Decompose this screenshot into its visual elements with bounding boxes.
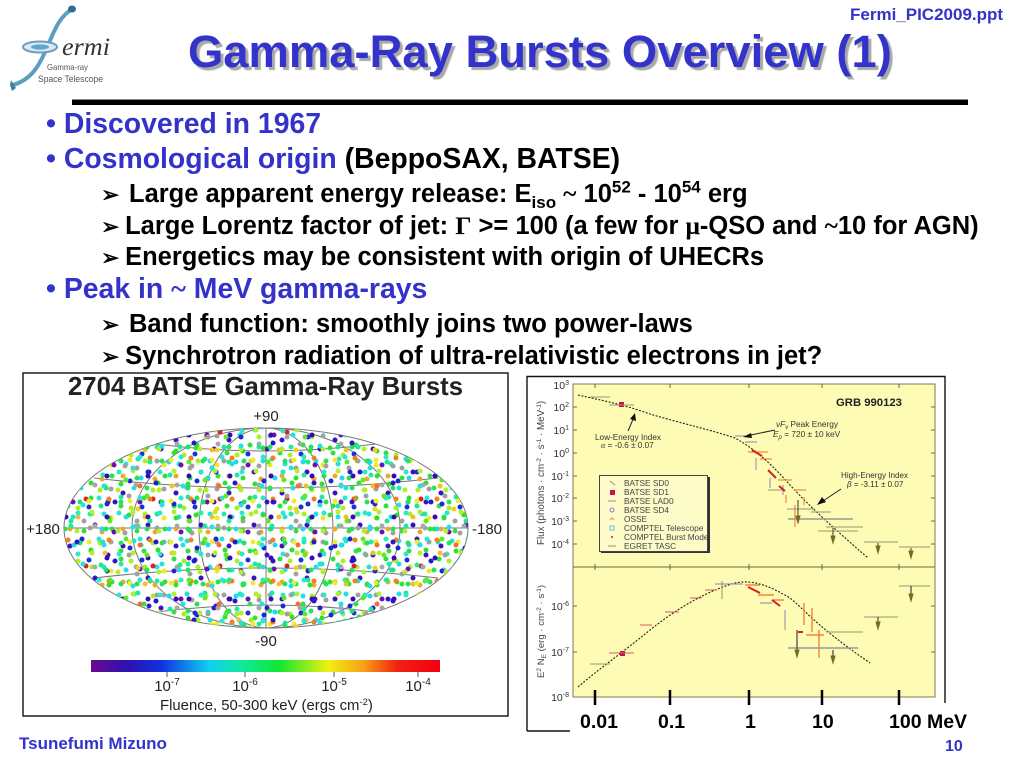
y axis labels: flux: 10 — [551, 493, 563, 505]
y axis labels: flux: 0 — [565, 448, 569, 455]
annotation: peak energy: E — [773, 429, 783, 441]
y axis labels: flux: -1 — [563, 471, 569, 478]
sub-bullet: synchrotron: ➢ — [101, 345, 119, 370]
logo: Fermi Gamma-ray Space Telescope — [10, 6, 110, 91]
axis labels — [26, 408, 502, 650]
energy axis labels: 0.1 — [658, 711, 685, 733]
legend: COMPTEL Burst Mode — [624, 532, 709, 542]
y axis title: energy flux: -2 — [536, 607, 543, 613]
sub-bullet: Lorentz factor: Large Lorentz factor of jet: Γ >= 100 (a few for μ-QSO and ~10 for AGN) — [125, 211, 979, 240]
annotation: high-energy index: High-Energy Index — [841, 471, 908, 480]
energy axis patch — [571, 703, 969, 733]
bottom spectrum curve — [578, 582, 870, 687]
y axis title: energy flux: · s — [536, 594, 547, 607]
y axis title: energy flux: ) — [536, 585, 547, 588]
legend: BATSE SD0 — [624, 478, 669, 488]
y axis labels: flux: 10 — [553, 448, 565, 460]
y axis labels: flux: 10 — [553, 402, 565, 414]
colour bar: -7 — [171, 677, 180, 688]
y axis title: flux: · MeV — [536, 409, 547, 439]
sub-bullet: energetics: Energetics may be consistent with origin of UHECRs — [125, 243, 764, 271]
annotation: low-energy index: α = -0.6 ± 0.07 — [601, 441, 654, 450]
map title: 2704 BATSE Gamma-Ray Bursts — [68, 373, 463, 401]
page number: 10 — [945, 738, 963, 755]
bullet: cosmological origin: • Cosmological origin (BeppoSAX, BATSE) — [46, 143, 620, 175]
y axis labels: flux: 10 — [553, 425, 565, 437]
logo: Fermi Gamma-ray Space Telescope: Gamma-ray — [47, 62, 89, 72]
y axis labels: flux: 10 — [551, 601, 563, 613]
y axis labels: flux: 10 — [551, 647, 563, 659]
annotation: high-energy index: β = -3.11 ± 0.07 — [846, 480, 904, 489]
sub-bullet: band function: ➢ — [101, 313, 119, 338]
sub-bullet: energy release: ➢ — [101, 183, 119, 208]
sub-bullet: Lorentz factor: ➢ — [101, 215, 119, 240]
energy axis labels — [580, 711, 967, 733]
legend: COMPTEL Telescope — [624, 523, 704, 533]
legend: BATSE LAD0 — [624, 496, 674, 506]
presenter name: Tsunefumi Mizuno — [19, 734, 167, 753]
bullet: peak: • Peak in ~ MeV gamma-rays — [46, 273, 427, 305]
axis labels: +180 — [26, 521, 60, 538]
annotation: peak energy: Peak Energy — [788, 419, 839, 429]
y axis labels: flux: 10 — [551, 692, 563, 704]
axis labels: -90 — [255, 633, 277, 650]
panel: BATSE sky map — [22, 372, 509, 717]
y axis title: flux: Flux (photons · cm — [536, 464, 547, 545]
legend — [600, 476, 710, 553]
colour bar caption: ) — [368, 698, 373, 714]
energy axis labels: 100 MeV — [889, 711, 967, 733]
y axis labels: flux: 10 — [551, 471, 563, 483]
y axis title: flux: · s — [536, 444, 547, 458]
panel divider and minor ticks — [573, 384, 935, 652]
y axis title: energy flux: E — [536, 672, 547, 678]
top data points — [590, 397, 930, 558]
y axis labels: flux: 10 — [551, 516, 563, 528]
colour bar: -6 — [249, 677, 258, 688]
energy axis labels: 1 — [745, 711, 756, 733]
sky map: burst dots and graticule — [64, 428, 468, 628]
annotation: low-energy index — [595, 413, 661, 450]
frame base — [527, 730, 570, 732]
y axis title: energy flux: E — [541, 653, 548, 658]
annotation: high-energy index — [817, 471, 908, 505]
annotation: low-energy index: Low-Energy Index — [595, 433, 661, 442]
logo: Fermi Gamma-ray Space Telescope: Space Telescope — [38, 74, 103, 84]
y axis labels: flux — [551, 380, 569, 704]
legend: BATSE SD4 — [624, 505, 669, 515]
logo: Fermi Gamma-ray Space Telescope: ermi — [62, 34, 110, 61]
y axis labels: flux: -2 — [563, 493, 569, 500]
top spectrum curve — [578, 395, 868, 558]
title: Gamma-Ray Bursts Overview (1) — [188, 26, 892, 77]
energy axis labels: 0.01 — [580, 711, 618, 733]
y axis title: energy flux: 2 — [536, 668, 543, 672]
bullet: discovered: • Discovered in 1967 — [46, 108, 321, 140]
y axis title: flux: -1 — [536, 438, 543, 444]
annotation: peak energy: νF — [776, 419, 788, 431]
sub-bullet text: band function: Band function: smoothly joins two power-laws — [129, 310, 693, 338]
burst name: GRB 990123 — [836, 397, 902, 409]
y axis labels: flux: -4 — [563, 539, 569, 546]
sub-bullet: energetics: ➢ — [101, 246, 119, 271]
colour bar caption: -2 — [359, 697, 368, 708]
plot area — [573, 384, 935, 697]
y axis title: flux: -1 — [536, 404, 543, 410]
y axis labels: flux: -7 — [563, 647, 569, 654]
legend: EGRET TASC — [624, 541, 676, 551]
energy axis labels: 10 — [812, 711, 834, 733]
colour bar: 10 — [232, 678, 249, 695]
annotation: peak energy: ν — [785, 425, 788, 431]
y axis labels: flux: 10 — [551, 539, 563, 551]
frame — [527, 376, 945, 731]
title rule — [72, 99, 968, 105]
y axis title: energy flux: (erg · cm — [536, 613, 547, 654]
y axis title: flux: ) — [536, 401, 547, 404]
legend: BATSE SD1 — [624, 487, 669, 497]
y axis labels: flux: 3 — [565, 380, 569, 387]
panel: GRB 990123 spectrum — [526, 376, 946, 732]
y axis title: flux: -2 — [536, 458, 543, 464]
colour bar — [91, 660, 440, 695]
sub-bullet: synchrotron: Synchrotron radiation of ultra-relativistic electrons in jet? — [125, 342, 822, 370]
colour bar: 10 — [321, 678, 338, 695]
axis labels: +90 — [253, 408, 279, 425]
y axis labels: flux: 2 — [565, 402, 569, 409]
colour bar: 10 — [154, 678, 171, 695]
legend: OSSE — [624, 514, 648, 524]
colour bar caption: Fluence, 50-300 keV (ergs cm — [160, 698, 359, 714]
y axis labels: flux: 1 — [565, 425, 569, 432]
annotation: peak energy — [743, 419, 841, 441]
y axis labels: flux: -8 — [563, 692, 569, 699]
y axis labels: flux: -3 — [563, 516, 569, 523]
y axis labels: flux: 10 — [553, 380, 565, 392]
source file tag: Fermi_PIC2009.ppt — [850, 5, 1003, 24]
y axis labels: flux: -6 — [563, 601, 569, 608]
colour bar: -5 — [338, 677, 347, 688]
y axis title: energy flux: -1 — [536, 588, 543, 594]
colour bar: -4 — [422, 677, 431, 688]
frame — [23, 373, 508, 716]
sub-bullet text: energy release: Large apparent energy release: Eiso ~ 1052 - 1054 erg — [129, 178, 748, 212]
annotation: peak energy: = 720 ± 10 keV — [782, 429, 841, 439]
axis labels: -180 — [472, 521, 502, 538]
energy axis ticks — [595, 690, 899, 705]
annotation: peak energy: p — [778, 435, 783, 441]
colour bar: 10 — [405, 678, 422, 695]
y axis title: energy flux: N — [536, 658, 547, 668]
bottom data points — [590, 581, 930, 664]
